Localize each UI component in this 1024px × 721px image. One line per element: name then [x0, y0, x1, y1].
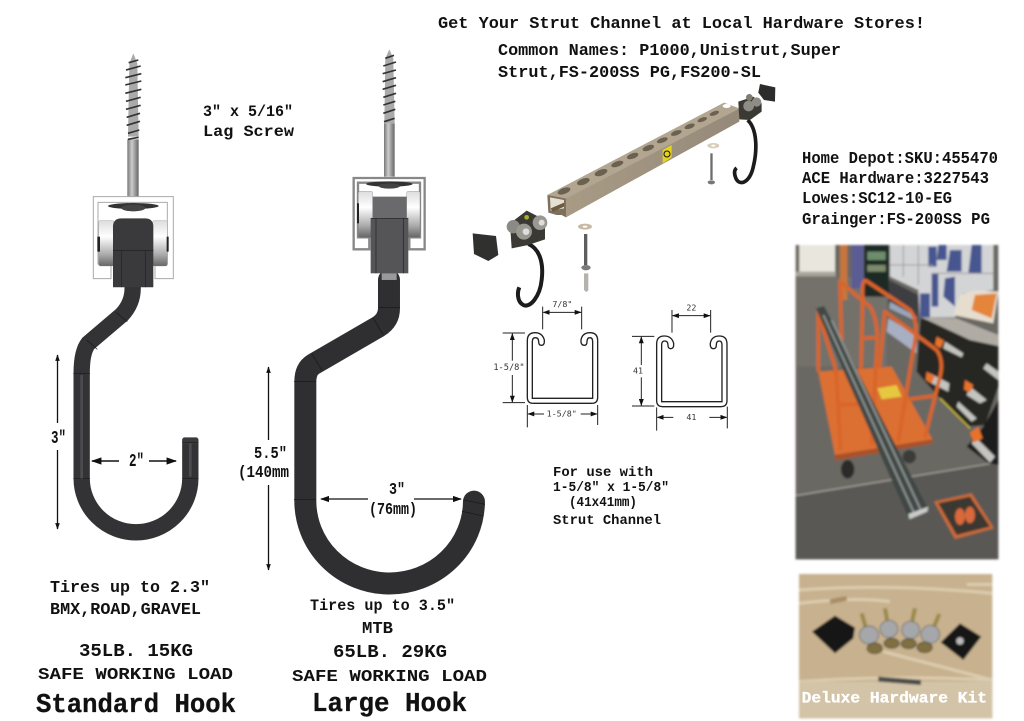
retailer SKU list: Grainger:FS-200SS PG [802, 210, 990, 229]
dimension: height 5.5 inch [238, 367, 289, 570]
left hook and carriage [507, 211, 547, 306]
standard hook specifications: Tires up to 2.3" [50, 578, 210, 597]
large hook specifications: Large Hook [312, 690, 467, 720]
dimension: height 5.5 inch: 5.5" [254, 445, 287, 464]
dimension: width 2 inch [92, 452, 176, 472]
channel [547, 103, 739, 217]
standard hook specifications: 35LB. 15KG [79, 642, 193, 662]
standard hook specifications [36, 578, 236, 721]
imperial profile: 7/8" [552, 299, 572, 309]
kit caption: Deluxe Hardware Kit [802, 690, 987, 708]
dimension: width 3 inch: (76mm) [369, 501, 417, 520]
header text: where to buy strut channel: Common Names: P1000,Unistrut,Super [498, 42, 841, 61]
standard hook specifications: BMX,ROAD,GRAVEL [50, 600, 201, 619]
dimension: height 3 inch: 3" [51, 429, 66, 449]
right hook and carriage [735, 94, 762, 183]
note: compatible strut channel size: For use with [553, 465, 653, 481]
hook body [294, 280, 485, 583]
imperial profile: 1-5/8" [547, 409, 577, 419]
large hook specifications: 65LB. 29KG [333, 643, 447, 663]
mount and lag screw [93, 53, 173, 287]
note: compatible strut channel size [553, 465, 669, 529]
header text: where to buy strut channel: Get Your Strut Channel at Local Hardware Stores! [438, 15, 925, 34]
large hook illustration [238, 49, 485, 583]
large hook specifications: MTB [362, 620, 393, 639]
metric profile [632, 302, 727, 431]
photo: deluxe hardware kit [799, 574, 992, 718]
dimension: width 2 inch: 2" [129, 452, 144, 472]
cart rails [818, 281, 941, 450]
dimension: width 3 inch [321, 481, 461, 520]
retailer SKU list: Home Depot:SKU:455470 [802, 149, 998, 168]
display table [917, 318, 998, 427]
left end cap [473, 233, 498, 261]
header text: where to buy strut channel [438, 15, 925, 83]
note: compatible strut channel size: 1-5/8" x 1-5/8" [553, 480, 669, 496]
metric profile: 41 [686, 412, 696, 422]
floor sign [934, 493, 994, 539]
hook body [73, 283, 198, 532]
standard hook specifications: SAFE WORKING LOAD [38, 666, 233, 685]
store shelves of boxes [890, 245, 993, 317]
strut channel profile diagrams [493, 299, 727, 431]
metric profile: 22 [686, 302, 696, 312]
large hook specifications: SAFE WORKING LOAD [292, 668, 487, 687]
large hook specifications [292, 597, 487, 720]
label: lag screw size: Lag Screw [203, 123, 294, 141]
standard hook illustration [51, 53, 198, 532]
retailer SKU list [802, 149, 998, 229]
note: compatible strut channel size: (41x41mm) [569, 495, 637, 511]
imperial profile: 1-5/8" [493, 363, 525, 373]
strut on cart [816, 306, 928, 519]
photo: strut channel on hardware store cart [796, 245, 998, 559]
label: lag screw size: 3" x 5/16" [203, 103, 293, 121]
metric profile: 41 [633, 365, 643, 375]
yellow logo label [663, 145, 672, 163]
dimension: height 5.5 inch: (140mm [238, 464, 289, 483]
left washer and screw [578, 224, 592, 292]
mount and lag screw [354, 49, 425, 280]
exploded view of strut channel assembly [473, 84, 775, 306]
right washer and screw [707, 143, 719, 184]
retailer SKU list: ACE Hardware:3227543 [802, 169, 989, 188]
retailer SKU list: Lowes:SC12-10-EG [802, 189, 952, 208]
cart deck [818, 367, 933, 455]
large hook specifications: Tires up to 3.5" [310, 597, 455, 615]
dimension: width 3 inch: 3" [389, 481, 405, 500]
note: compatible strut channel size: Strut Channel [553, 513, 661, 529]
right end cap [758, 84, 775, 102]
standard hook specifications: Standard Hook [36, 691, 236, 721]
label: lag screw size [203, 103, 294, 141]
imperial profile [493, 299, 598, 427]
header text: where to buy strut channel: Strut,FS-200SS PG,FS200-SL [498, 64, 761, 83]
